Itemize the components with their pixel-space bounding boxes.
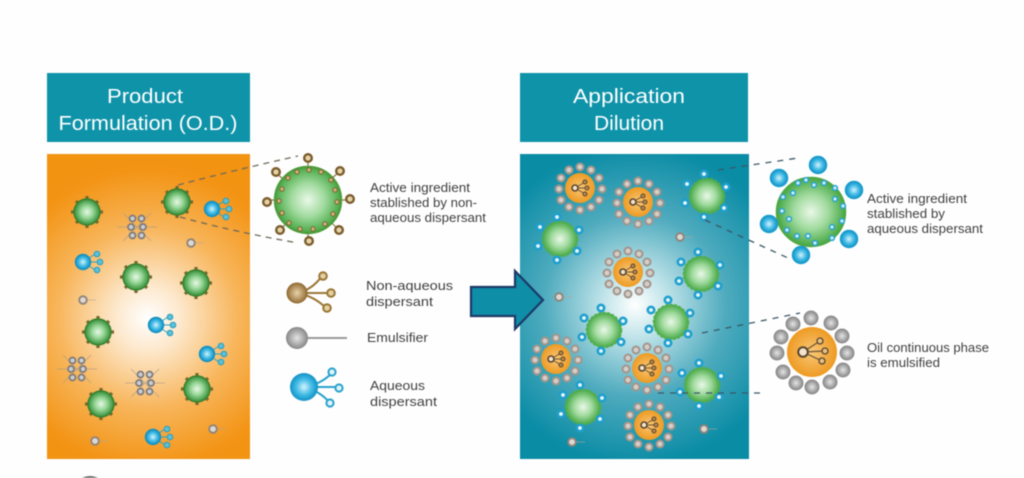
icon: emulsified oil droplet [770,311,854,394]
legend: emulsifier [286,328,428,348]
panel: application dilution [520,154,749,459]
zoom lines: right details [658,158,800,393]
heading: Application Dilution [520,73,748,142]
text: aqueous caption [867,192,984,236]
text: non-aqueous caption [370,181,487,225]
text: aqueous caption: aqueous dispersant [867,222,984,236]
text: oil caption [867,341,989,370]
cropped mark at bottom edge [82,476,98,478]
heading: Application Dilution: Dilution [594,113,664,135]
text: non-aqueous caption: Active ingredient [370,181,471,195]
heading: Product Formulation (O.D.): Product [107,86,183,108]
heading: Product Formulation (O.D.): Formulation (O.D.) [58,113,238,135]
icon: active ingredient with non-aqueous dispersant [263,154,354,245]
panel: product formulation [47,154,250,459]
heading: Application Dilution: Application [573,86,685,108]
heading: Product Formulation (O.D.) [47,73,250,142]
arrow [471,271,543,329]
zoom lines: left detail [178,156,298,243]
text: non-aqueous caption: stablished by non- [370,196,477,210]
legend: aqueous dispersant [290,368,438,409]
legend: non-aqueous dispersant [287,272,453,312]
text: aqueous caption: stablished by [867,207,946,221]
text: non-aqueous caption: aqueous dispersant [370,211,487,225]
text: aqueous caption: Active ingredient [867,192,968,206]
legend: aqueous dispersant: dispersant [370,395,438,409]
legend: emulsifier: Emulsifier [367,331,428,345]
legend: non-aqueous dispersant: dispersant [366,295,434,309]
legend: aqueous dispersant: Aqueous [370,379,425,393]
legend: non-aqueous dispersant: Non-aqueous [366,279,453,293]
icon: active ingredient with aqueous dispersant [760,156,862,264]
text: oil caption: Oil continuous phase [867,341,989,355]
text: oil caption: is emulsified [867,356,940,370]
